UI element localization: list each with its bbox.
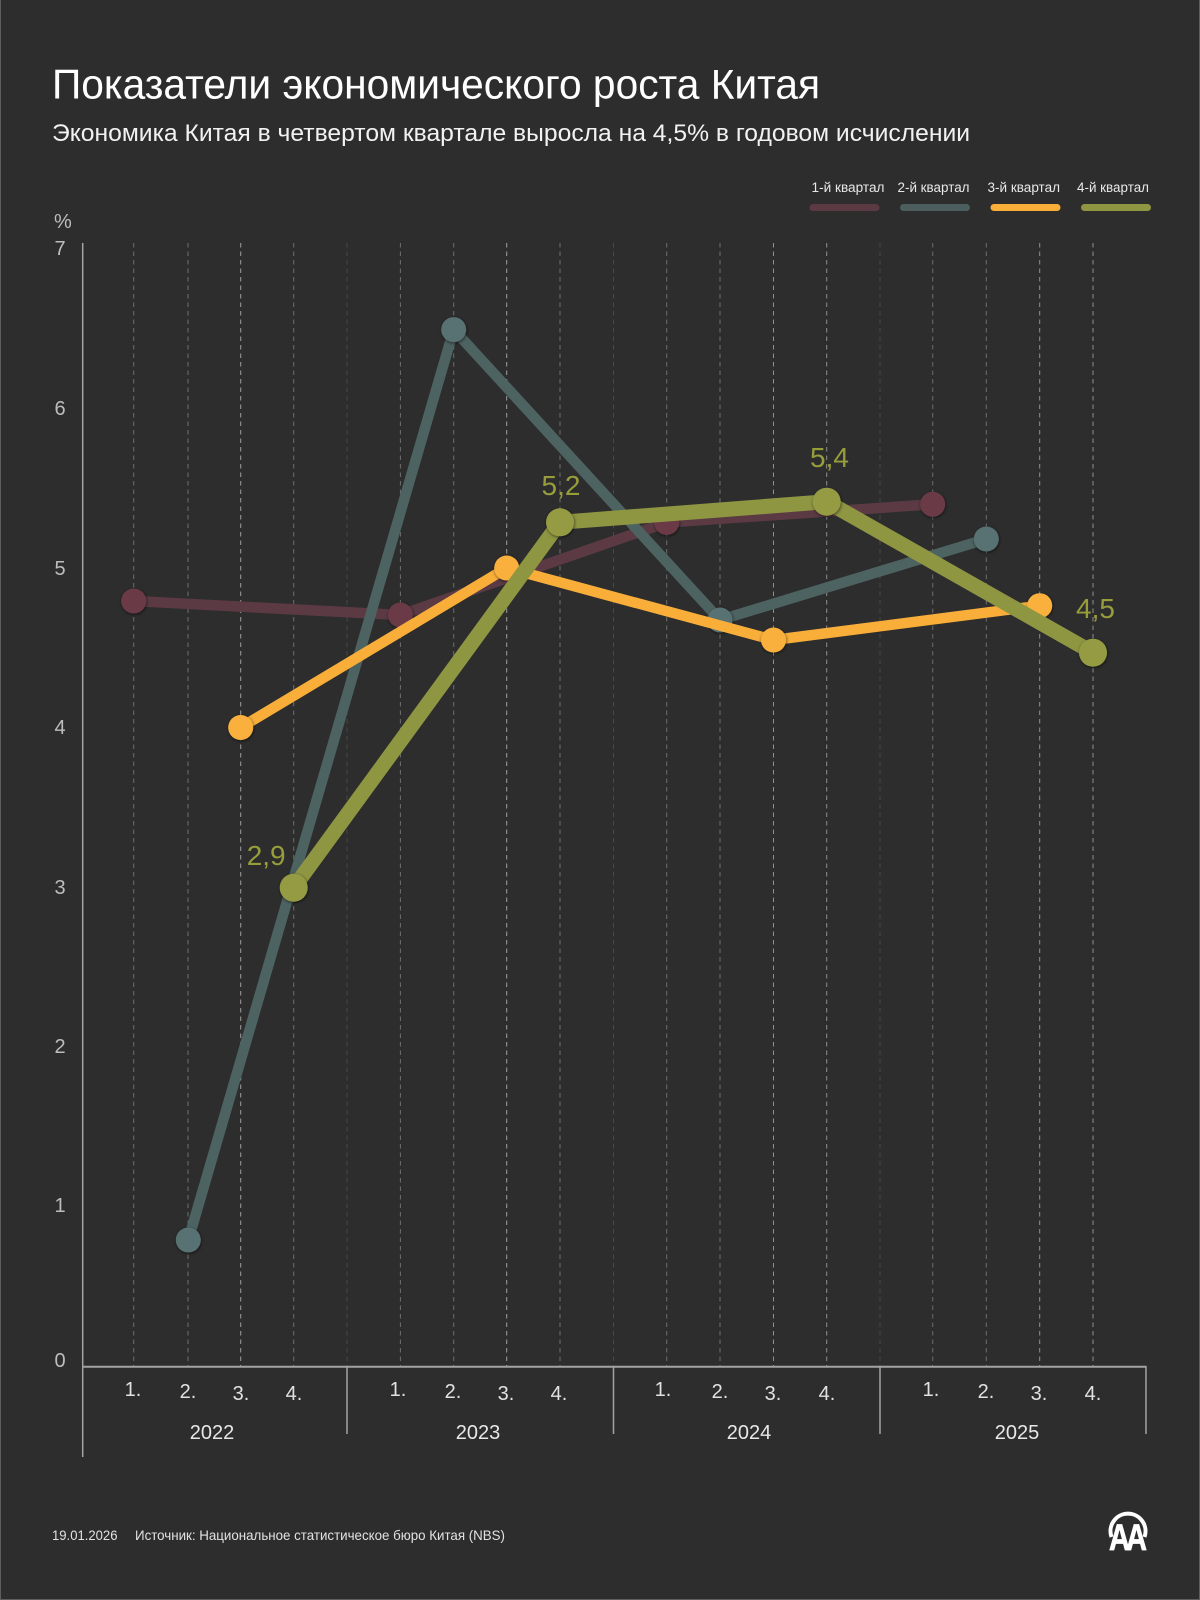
subtitle: Экономика Китая в четвертом квартале выросла на 4,5% в годовом исчислении <box>52 120 970 147</box>
quarter labels: 3. <box>233 1383 249 1405</box>
quarter labels: 4. <box>551 1383 567 1405</box>
footer source: Источник: Национальное статистическое бюро Китая (NBS) <box>135 1527 505 1543</box>
value labels: 5,2 <box>542 470 580 501</box>
legend item: 1st quarter: 1-й квартал <box>812 180 884 195</box>
legend <box>810 180 1151 211</box>
y axis labels: 2 <box>54 1036 66 1058</box>
logo: AA: A <box>1109 1517 1130 1558</box>
year labels: 2022 <box>190 1422 234 1444</box>
y axis labels: 6 <box>54 398 66 420</box>
y axis unit: % <box>54 211 72 233</box>
year labels: 2025 <box>995 1422 1039 1444</box>
quarter labels: 1. <box>655 1379 671 1401</box>
line series: 1st quarter <box>121 492 945 628</box>
quarter labels: 1. <box>923 1379 939 1401</box>
y axis labels: 0 <box>54 1350 66 1372</box>
quarter labels: 4. <box>819 1383 835 1405</box>
quarter labels: 1. <box>125 1379 141 1401</box>
year labels: 2024 <box>727 1422 771 1444</box>
legend item: 1st quarter <box>810 180 884 211</box>
year labels <box>190 1422 1039 1444</box>
quarter labels <box>125 1379 1101 1405</box>
quarter labels: 2. <box>445 1381 461 1403</box>
quarter labels: 2. <box>180 1381 196 1403</box>
line series: 2nd quarter <box>176 317 999 1253</box>
legend item: 3rd quarter <box>988 180 1060 211</box>
title: Показатели экономического роста Китая <box>52 60 820 108</box>
footer date: 19.01.2026 <box>52 1527 118 1543</box>
y axis labels: 3 <box>54 877 66 899</box>
quarter labels: 4. <box>286 1383 302 1405</box>
y axis labels: 4 <box>54 717 66 739</box>
y axis labels: 7 <box>54 238 66 260</box>
quarter labels: 3. <box>498 1383 514 1405</box>
quarter labels: 2. <box>712 1381 728 1403</box>
quarter labels: 4. <box>1085 1383 1101 1405</box>
line series: 4th quarter <box>280 488 1107 902</box>
logo: AA: A <box>1126 1517 1147 1558</box>
axes <box>82 243 1146 1457</box>
y axis labels <box>54 238 66 1372</box>
legend item: 4th quarter: 4-й квартал <box>1077 180 1149 195</box>
quarter labels: 1. <box>390 1379 406 1401</box>
value labels: 4,5 <box>1076 593 1115 624</box>
y axis labels: 1 <box>54 1195 66 1217</box>
value labels: 5,4 <box>810 442 849 473</box>
value labels: 2,9 <box>247 840 286 871</box>
quarter labels: 3. <box>765 1383 781 1405</box>
legend item: 2nd quarter: 2-й квартал <box>898 180 970 195</box>
legend item: 4th quarter <box>1077 180 1151 211</box>
year labels: 2023 <box>456 1422 500 1444</box>
logo: AA <box>1109 1514 1147 1558</box>
quarter labels: 3. <box>1031 1383 1047 1405</box>
line series: 3rd quarter <box>228 556 1052 740</box>
legend item: 3rd quarter: 3-й квартал <box>988 180 1060 195</box>
quarter labels: 2. <box>978 1381 994 1403</box>
y axis labels: 5 <box>54 558 66 580</box>
value labels <box>247 442 1115 871</box>
legend item: 2nd quarter <box>898 180 970 211</box>
